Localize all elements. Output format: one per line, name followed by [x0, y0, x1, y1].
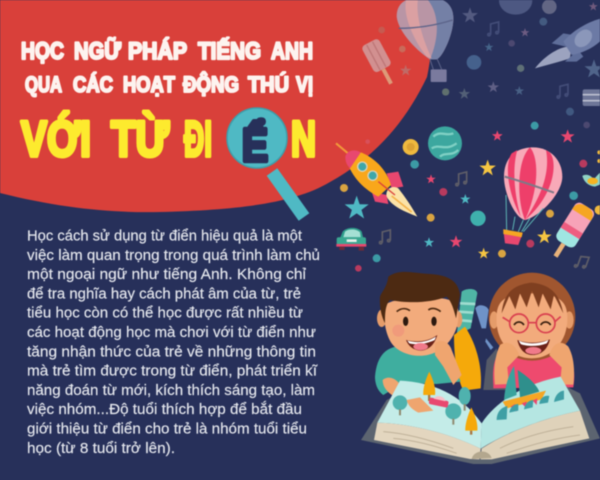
- body paragraph: mà trẻ tìm được trong từ điển, phát triển kĩ: [27, 363, 318, 380]
- title line 2: THÚ: [248, 72, 289, 97]
- body paragraph: các hoạt động học mà chơi với từ điển như: [27, 324, 316, 341]
- toy car on book: [429, 394, 450, 408]
- faded stars: [400, 2, 600, 99]
- music notes: [379, 172, 589, 270]
- butterfly: [582, 171, 600, 187]
- boy: [375, 272, 462, 413]
- body paragraph: một ngoại ngữ như tiếng Anh. Không chỉ: [27, 266, 307, 283]
- title line 1: TIẾNG: [198, 37, 261, 65]
- title line 1: HỌC: [21, 38, 64, 65]
- body paragraph: [27, 228, 320, 457]
- title line 3 yellow: [21, 111, 316, 167]
- title line 1: [21, 37, 313, 65]
- faded planets: [365, 0, 590, 144]
- title line 1: PHÁP: [128, 37, 187, 65]
- legs and socks: [454, 289, 507, 391]
- body paragraph: năng đoán từ mới, kích thích sáng tạo, làm: [27, 382, 315, 399]
- sailboat on book: [503, 366, 546, 412]
- pop-up trees: [393, 372, 477, 435]
- title line 2: QUA: [25, 72, 62, 97]
- waves on book: [497, 391, 564, 420]
- faded rocket: [535, 18, 600, 68]
- body paragraph: việc nhóm...Độ tuổi thích hợp để bắt đầu: [27, 401, 302, 418]
- open book: [361, 366, 600, 464]
- faded popsicle: [361, 38, 400, 88]
- title: [21, 37, 316, 167]
- title line 1: NGỮ: [74, 37, 121, 65]
- title line 2: [25, 72, 313, 97]
- body paragraph: việc làm quan trọng trong quá trình làm chủ: [27, 247, 320, 264]
- car: [336, 228, 366, 251]
- red title blob: [0, 0, 432, 212]
- body paragraph: tăng nhận thức của trẻ về những thông tin: [27, 343, 316, 360]
- faded music notes: [488, 22, 568, 98]
- body paragraph: học (từ 8 tuổi trở lên).: [27, 440, 175, 457]
- body paragraph: Học cách sử dụng từ điển hiệu quả là một: [27, 228, 303, 244]
- title line 2: VỊ: [296, 72, 313, 97]
- title line 3 yellow: N: [291, 111, 316, 167]
- teal planet: [428, 126, 462, 160]
- body paragraph: giới thiệu từ điển cho trẻ là nhóm tuổi tiểu: [27, 420, 307, 438]
- body paragraph: để tra nghĩa hay cách phát âm của từ, trẻ: [27, 285, 301, 302]
- magnifying glass: [227, 108, 304, 217]
- hot air balloon: [503, 147, 562, 245]
- title line 2: CÁC: [73, 72, 113, 97]
- small planets: [340, 122, 600, 272]
- faded background decorations: [361, 0, 600, 144]
- body paragraph: tiểu học còn có thể học được rất nhiều từ: [27, 305, 303, 322]
- girl: [489, 273, 575, 388]
- title line 2: ĐỘNG: [183, 72, 239, 97]
- magnifying glass: Ể: [242, 119, 268, 171]
- title line 3 yellow: TỪ: [111, 111, 169, 167]
- faded striped object: [583, 89, 600, 106]
- children reading book illustration: [361, 272, 600, 464]
- faded hot air balloon: [397, 0, 453, 82]
- popsicle: [546, 201, 596, 262]
- rocket: [336, 143, 417, 217]
- title line 2: HOẠT: [123, 72, 175, 97]
- title line 3 yellow: ĐI: [184, 111, 212, 167]
- title line 1: ANH: [271, 38, 313, 65]
- title line 3 yellow: VỚI: [21, 111, 91, 167]
- colourful space decorations: [336, 122, 600, 272]
- bright stars: [345, 129, 575, 258]
- boy hand: [407, 397, 433, 413]
